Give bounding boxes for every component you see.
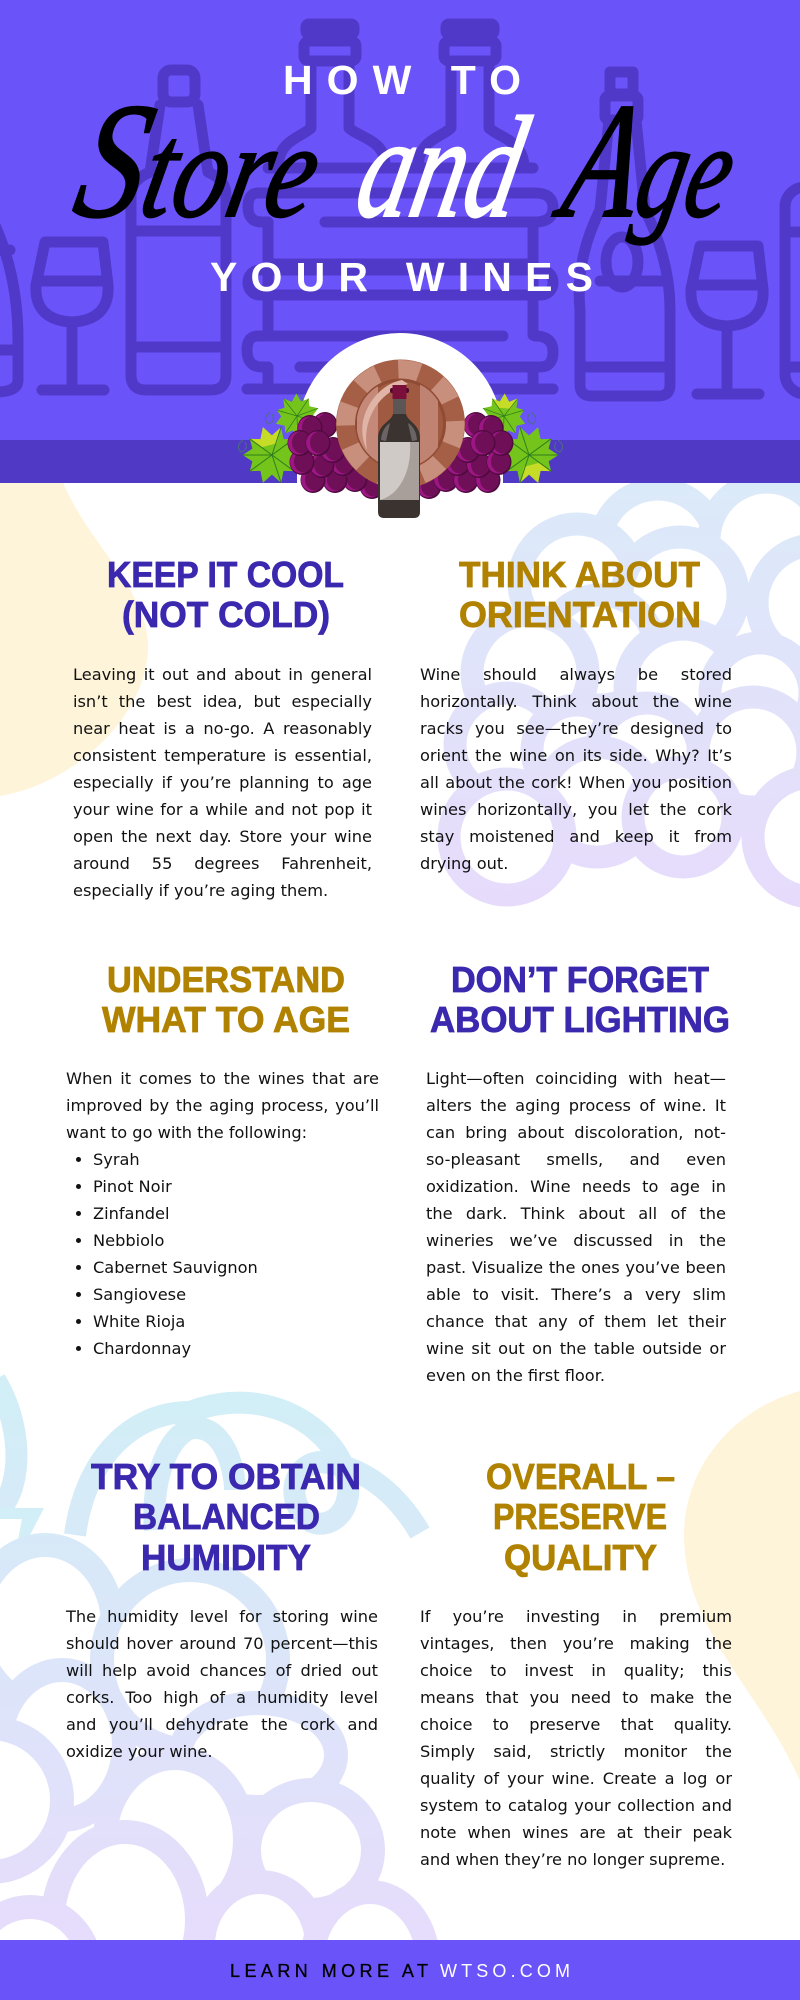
panel heading: Try to obtain balanced humidity: HUMIDITY (141, 1537, 311, 1578)
text block: think about orientation: Wine should always be stored (420, 665, 732, 684)
text block: think about orientation: racks you see—they’re designed to (420, 719, 732, 738)
text block: humidity: will help avoid chances of dried out (66, 1661, 378, 1680)
text block: think about orientation: orient the wine on its side. Why? It’s (420, 746, 732, 765)
text block: don't forget about lighting: alters the aging process of wine. It (426, 1096, 726, 1115)
title: Store: Store (62, 70, 339, 253)
text block: keep it cool: Leaving it out and about in general (73, 665, 372, 684)
text block: think about orientation (420, 665, 732, 873)
panel heading: Try to obtain balanced humidity (91, 1456, 361, 1578)
list of wines (76, 1150, 258, 1358)
text block: don't forget about lighting (426, 1069, 726, 1385)
text block: don't forget about lighting: even on the first floor. (426, 1366, 605, 1385)
text block: keep it cool: open the next day. Store your wine (73, 827, 372, 846)
hero illustration: barrel, bottle, grapes (238, 333, 563, 518)
text block: overall preserve quality: Simply said, strictly monitor the (420, 1742, 732, 1761)
background blob: yellow top-left (0, 480, 148, 796)
text block: think about orientation: drying out. (420, 854, 508, 873)
white dome (297, 333, 503, 483)
text block: understand what to age (66, 1069, 379, 1358)
footer bar (0, 1940, 800, 2000)
icon: left vine leaves (238, 388, 325, 483)
panel heading: Think about orientation: THINK ABOUT (459, 554, 700, 595)
background: vine tendrils bottom-left (0, 1380, 420, 1540)
panel heading: Think about orientation (459, 554, 701, 635)
title: How to: HOW TO (283, 57, 521, 103)
list of wines: White Rioja (93, 1312, 185, 1331)
text block: overall preserve quality: and when they’re no longer supreme. (420, 1850, 725, 1869)
panel heading: Overall preserve quality: OVERALL – (486, 1456, 675, 1497)
text block: humidity: The humidity level for storing wine (66, 1607, 378, 1626)
list of wines: Pinot Noir (93, 1177, 172, 1196)
text block: humidity: corks. Too high of a humidity level (66, 1688, 378, 1707)
title: Your Wines: YOUR WINES (210, 254, 593, 300)
background blob: yellow bottom-right (684, 1391, 800, 1781)
text block: understand what to age: When it comes to the wines that are (66, 1069, 379, 1088)
title: and: and (345, 86, 540, 248)
text block: keep it cool: consistent temperature is essential, (73, 746, 372, 765)
background: grape cluster outline top-right (449, 482, 800, 897)
panel heading: Keep it cool (107, 554, 344, 635)
title: Age: Age (543, 70, 754, 253)
header band (0, 0, 800, 483)
text block: don't forget about lighting: chance that any of them let their (426, 1312, 726, 1331)
text block: keep it cool: around 55 degrees Fahrenheit, (73, 854, 372, 873)
text block: overall preserve quality: choice to invest in quality; this (420, 1661, 732, 1680)
footer bar: WTSO.COM (440, 1961, 570, 1981)
list of wines: Cabernet Sauvignon (93, 1258, 258, 1277)
list of wines: Sangiovese (93, 1285, 186, 1304)
panel heading: Don't forget about lighting: DON’T FORGET (451, 959, 709, 1000)
text block: keep it cool (73, 665, 372, 900)
background: grape cluster outline bottom-left (0, 1545, 428, 2000)
text block: understand what to age: want to go with the following: (66, 1123, 307, 1142)
panel heading: Understand what to age: UNDERSTAND (107, 959, 345, 1000)
text block: overall preserve quality: If you’re investing in premium (420, 1607, 732, 1626)
panel heading: Don't forget about lighting (430, 959, 730, 1040)
text block: think about orientation: wines horizontally, you let the cork (420, 800, 732, 819)
panel heading: Keep it cool: (NOT COLD) (122, 594, 330, 635)
text block: don't forget about lighting: the dark. Think about all of the (426, 1204, 726, 1223)
text block: overall preserve quality (420, 1607, 732, 1869)
panel heading: Overall preserve quality: QUALITY (504, 1537, 657, 1578)
text block: think about orientation: horizontally. Think about the wine (420, 692, 732, 711)
text block: don't forget about lighting: wine sit out on the table outside or (426, 1339, 726, 1358)
text block: overall preserve quality: means that you need to make the (420, 1688, 732, 1707)
footer bar: LEARN MORE AT (230, 1961, 428, 1981)
text block: keep it cool: especially if you’re aging them. (73, 881, 328, 900)
panel heading: Understand what to age (102, 959, 350, 1040)
text block: humidity: and you’ll dehydrate the cork and (66, 1715, 378, 1734)
list of wines: Nebbiolo (93, 1231, 164, 1250)
text block: keep it cool: isn’t the best idea, but especially (73, 692, 372, 711)
text block: overall preserve quality: vintages, then you’re making the (420, 1634, 732, 1653)
text block: don't forget about lighting: able to visit. There’s a very slim (426, 1285, 726, 1304)
text block: think about orientation: stay moistened and keep it from (420, 827, 732, 846)
icon: left grapes (288, 412, 384, 499)
panel heading: Think about orientation: ORIENTATION (459, 594, 701, 635)
panel heading: Overall preserve quality (486, 1456, 675, 1578)
text block: don't forget about lighting: Light—often coinciding with heat— (426, 1069, 726, 1088)
panel heading: Don't forget about lighting: ABOUT LIGHTING (430, 999, 730, 1040)
text block: humidity: should hover around 70 percent—this (66, 1634, 378, 1653)
list of wines: Chardonnay (93, 1339, 191, 1358)
list of wines: Zinfandel (93, 1204, 169, 1223)
text block: overall preserve quality: system to catalog your collection and (420, 1796, 732, 1815)
text block: don't forget about lighting: past. Visualize the ones you’ve been (426, 1258, 726, 1277)
text block: keep it cool: especially if you’re planning to age (73, 773, 372, 792)
icon: wine bottle (378, 385, 420, 518)
text block: don't forget about lighting: so-pleasant smells, and even (426, 1150, 726, 1169)
icon: barrel (336, 360, 465, 488)
text block: humidity: oxidize your wine. (66, 1742, 213, 1761)
text block: don't forget about lighting: oxidization. Wine needs to age in (426, 1177, 726, 1196)
text block: don't forget about lighting: wineries we’ve discussed in the (426, 1231, 726, 1250)
text block: keep it cool: your wine for a while and not pop it (73, 800, 372, 819)
panel heading: Overall preserve quality: PRESERVE (493, 1496, 667, 1537)
text block: humidity (66, 1607, 378, 1761)
panel heading: Try to obtain balanced humidity: BALANCED (133, 1496, 320, 1537)
header background: bottles and glasses line art (0, 24, 800, 396)
text block: overall preserve quality: choice to preserve that quality. (420, 1715, 732, 1734)
panel heading: Try to obtain balanced humidity: TRY TO OBTAIN (91, 1456, 361, 1497)
panel heading: Keep it cool: KEEP IT COOL (107, 554, 344, 595)
text block: don't forget about lighting: can bring about discoloration, not- (426, 1123, 726, 1142)
text block: keep it cool: near heat is a no-go. A reasonably (73, 719, 372, 738)
icon: right vine leaves (476, 388, 563, 483)
panel heading: Understand what to age: WHAT TO AGE (102, 999, 350, 1040)
text block: overall preserve quality: quality of your wine. Create a log or (420, 1769, 732, 1788)
icon: right grapes (416, 412, 514, 499)
text block: think about orientation: all about the cork! When you position (420, 773, 732, 792)
text block: understand what to age: improved by the aging process, you’ll (66, 1096, 379, 1115)
list of wines: Syrah (93, 1150, 140, 1169)
text block: overall preserve quality: note when wines are at their peak (420, 1823, 732, 1842)
